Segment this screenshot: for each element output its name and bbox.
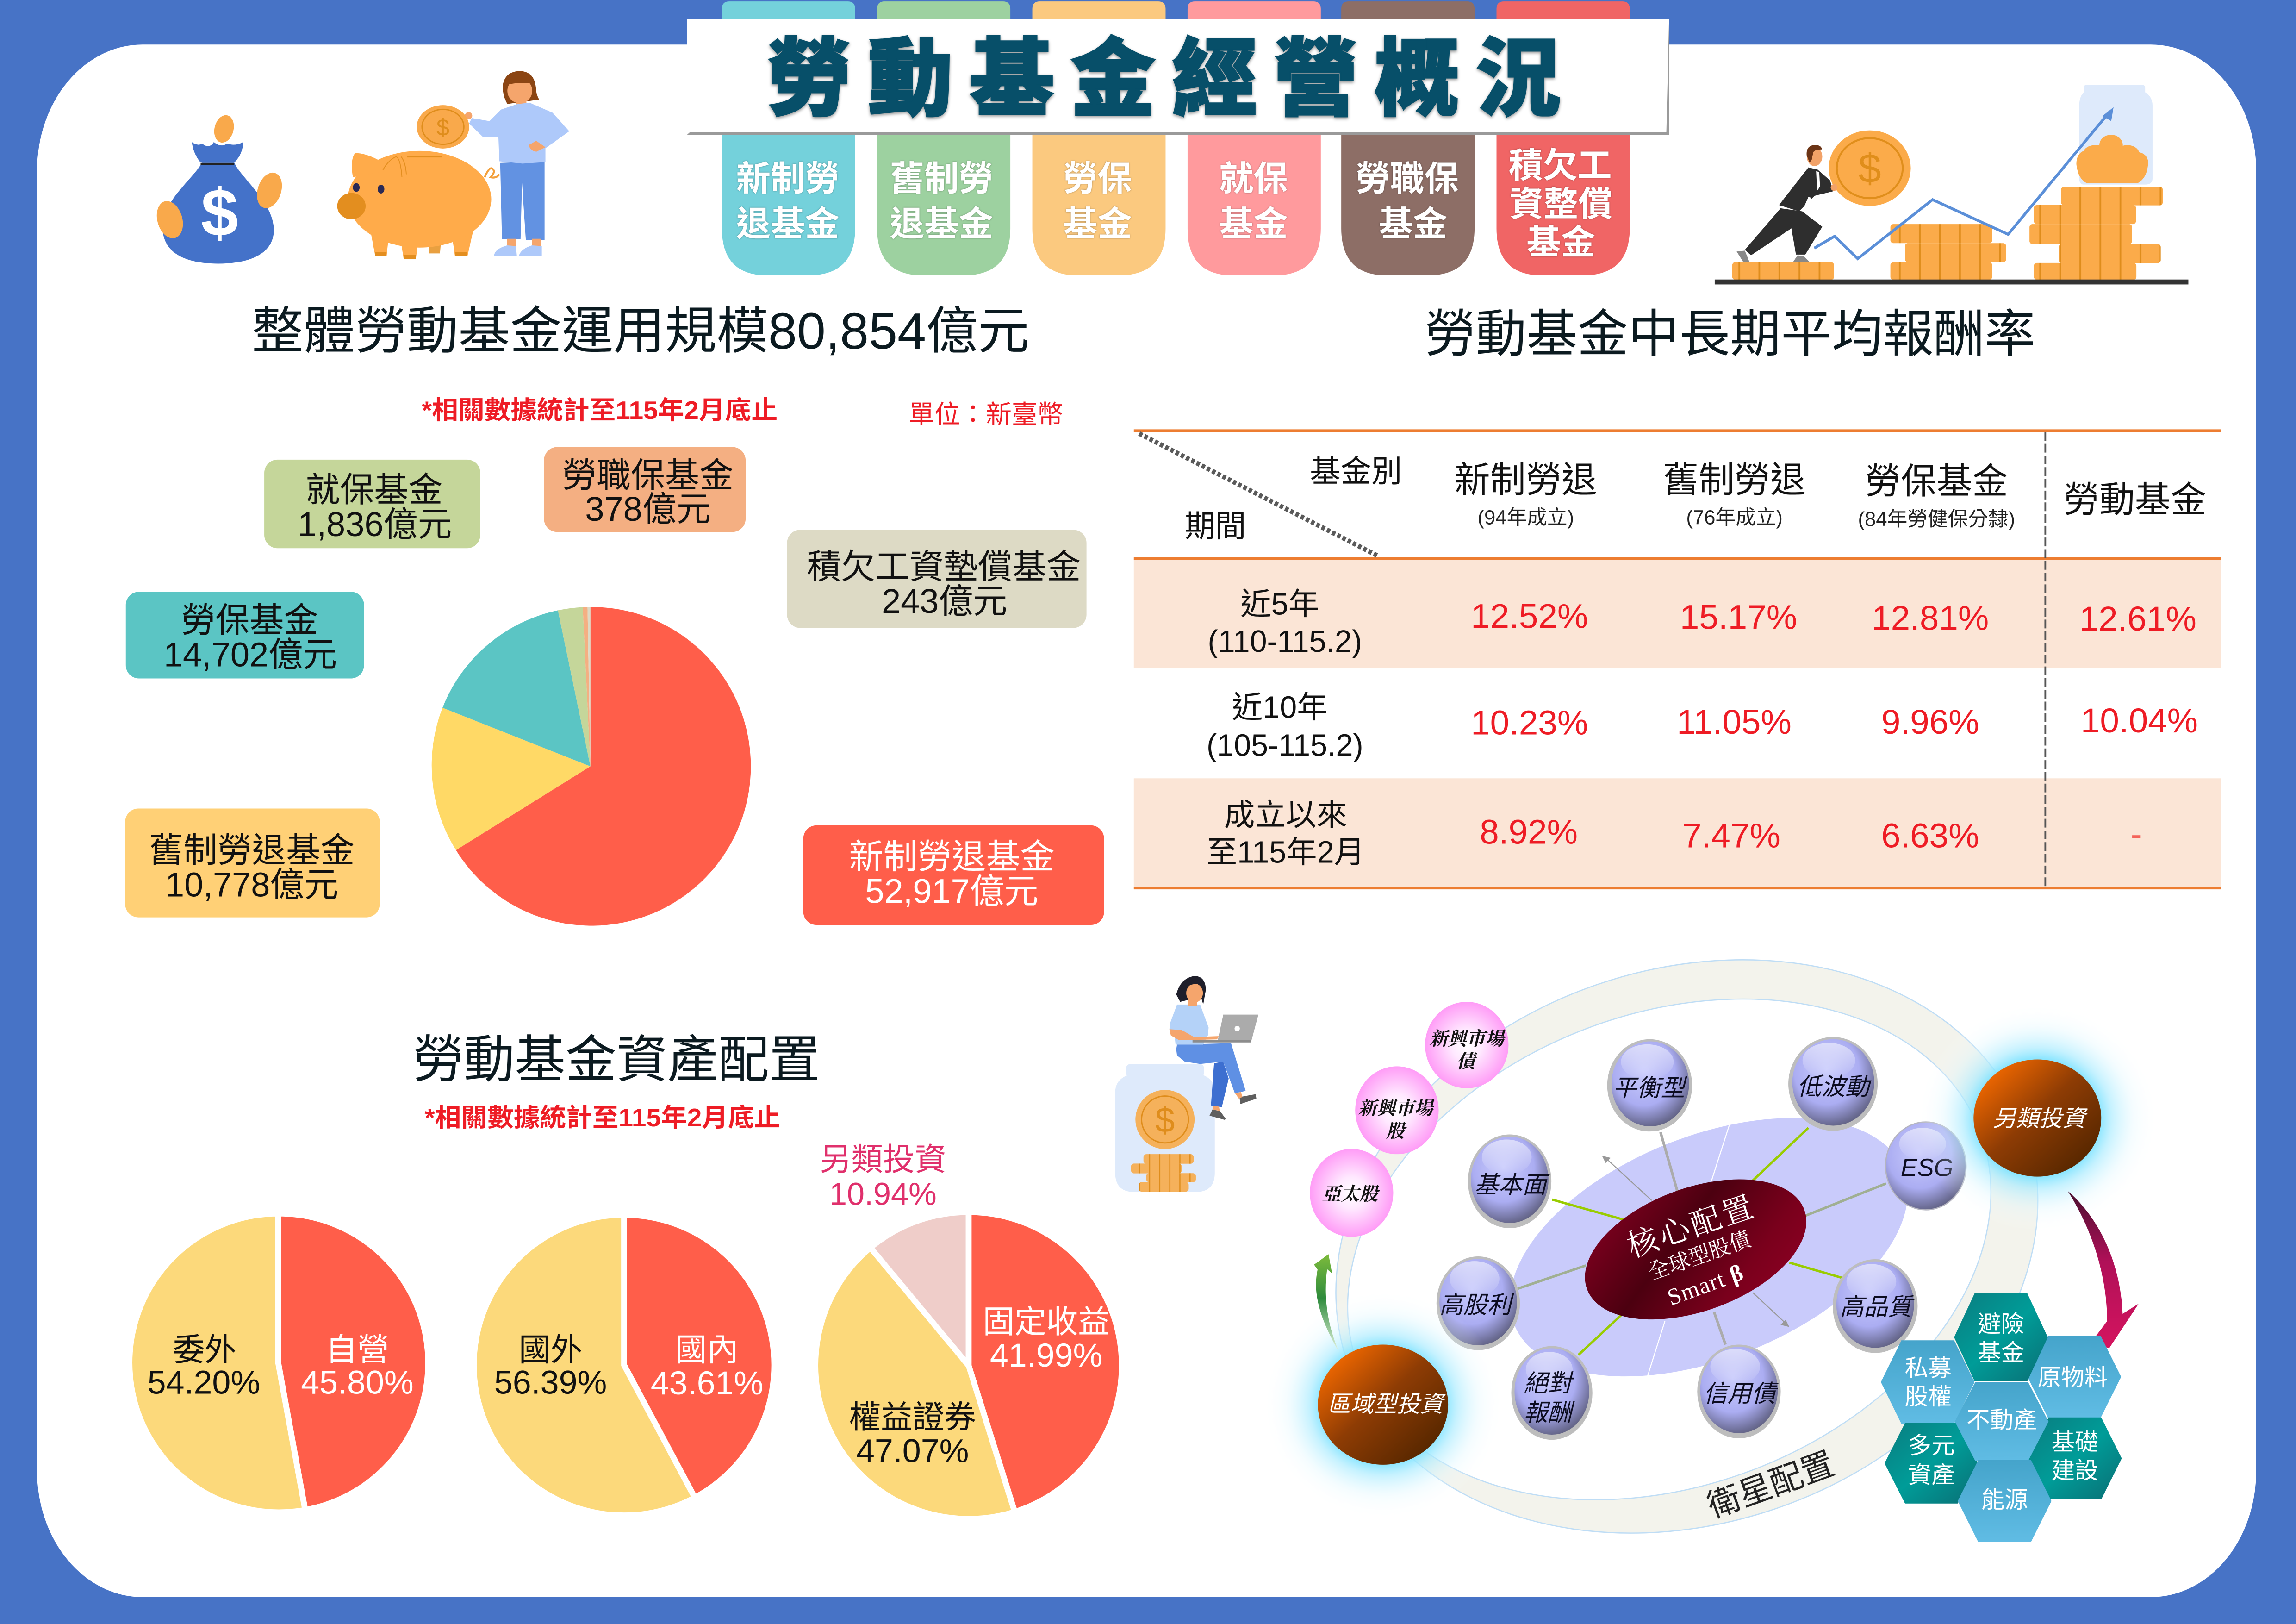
pie: asset classes: 固定收益 — [983, 1304, 1110, 1340]
orb: alternative investment: 另類投資 — [1993, 1106, 2088, 1131]
hexagon: private equity — [1881, 1340, 1975, 1424]
bubble: emerging market equities: 新興市場 — [1358, 1098, 1435, 1119]
label: arrear wage fund: 積欠工資墊償基金 — [807, 548, 1081, 586]
row: last 5 years — [1208, 587, 2196, 659]
sphere: high dividend: 高股利 — [1439, 1291, 1515, 1318]
hexagon cluster: alternative asset types — [1881, 1293, 2122, 1542]
label: old pension fund: 10,778億元 — [165, 865, 338, 904]
core allocation center: 核心配置 — [1623, 1190, 1760, 1264]
row: last 10 years — [1207, 690, 2198, 763]
bubble: emerging market equities — [1355, 1066, 1439, 1154]
label: arrear wage fund: 243億元 — [882, 582, 1007, 620]
row: last 5 years: 近5年 — [1240, 587, 1319, 621]
row: last 10 years: 11.05% — [1677, 702, 1792, 741]
table row backgrounds — [1134, 559, 2221, 888]
row: last 5 years: (110-115.2) — [1208, 625, 1362, 659]
hexagon: infrastructure: 基礎 — [2052, 1429, 2098, 1455]
label: satellite allocation: 衛星配置 — [1703, 1445, 1839, 1525]
sphere: ESG — [1885, 1122, 1966, 1210]
row: since inception: 至115年2月 — [1207, 836, 1365, 870]
tab: old labor pension fund — [877, 1, 1010, 275]
row: since inception: 6.63% — [1881, 816, 1979, 855]
bubble: emerging market equities: 股 — [1386, 1121, 1407, 1142]
title: 勞動基金經營概況 — [766, 31, 1577, 126]
woman with laptop — [1170, 976, 1258, 1120]
note: data date 2: *相關數據統計至115年2月底止 — [425, 1103, 780, 1132]
hexagon: hedge funds: 避險 — [1978, 1311, 2024, 1337]
row: since inception: 7.47% — [1682, 816, 1780, 855]
tab: new labor pension fund: 退基金 — [736, 205, 840, 243]
big coin — [1829, 131, 1911, 206]
bubble: asia pacific equities: 亞太股 — [1322, 1184, 1380, 1205]
table header: (94年成立) — [1477, 506, 1574, 529]
note: data date: *相關數據統計至115年2月底止 — [422, 396, 778, 425]
sphere: fundamental: 基本面 — [1475, 1171, 1550, 1198]
tab: new labor pension fund: 新制勞 — [736, 159, 840, 198]
hexagon: multi asset: 資產 — [1908, 1462, 1955, 1488]
table header: 基金別 — [1310, 455, 1402, 489]
fund tabs — [722, 1, 1630, 275]
icon: piggy bank with woman holding a coin: $ — [436, 114, 449, 141]
sphere: absolute return — [1511, 1346, 1593, 1440]
table header: 新制勞退 — [1454, 460, 1597, 500]
row: last 10 years: 10.04% — [2081, 701, 2198, 740]
row: since inception — [1207, 798, 2142, 870]
table header: 勞動基金 — [2064, 480, 2206, 520]
jar coins — [2076, 135, 2148, 183]
row: since inception: 8.92% — [1480, 812, 1578, 851]
label: new pension fund: 新制勞退基金 — [849, 837, 1055, 876]
pie: domestic vs foreign: 國外 — [519, 1332, 582, 1368]
row: last 5 years: 12.52% — [1471, 597, 1588, 636]
pie: domestic vs foreign: 43.61% — [651, 1365, 763, 1402]
table header: (84年勞健保分隸) — [1858, 508, 2015, 531]
row: last 10 years: 10.23% — [1471, 703, 1588, 742]
hexagon: infrastructure — [2028, 1418, 2122, 1499]
hexagon: private equity: 私募 — [1905, 1355, 1952, 1381]
pie: asset classes — [815, 1212, 1122, 1519]
orb: regional investment: 區域型投資 — [1327, 1391, 1446, 1417]
tab: labor insurance fund: 基金 — [1063, 205, 1132, 243]
pie: domestic vs foreign — [474, 1215, 774, 1515]
label: new pension fund: 52,917億元 — [865, 872, 1039, 911]
sphere: absolute return: 報酬 — [1524, 1399, 1575, 1426]
table header: (76年成立) — [1686, 506, 1783, 529]
table header: 期間 — [1185, 510, 1246, 544]
illustration: woman on jar: $ — [1155, 1101, 1175, 1140]
pie: self managed vs outsourced: 委外 — [173, 1332, 236, 1368]
hexagon: energy — [1958, 1460, 2052, 1542]
hexagon: real estate: 不動產 — [1966, 1407, 2037, 1433]
jar — [2079, 85, 2153, 185]
pie chart: fund scale — [432, 607, 751, 926]
sphere: credit bonds: 信用債 — [1704, 1380, 1779, 1407]
coin stacks — [1732, 187, 2163, 280]
tab: employment insurance fund: 基金 — [1219, 205, 1288, 243]
bubble: emerging market bonds: 新興市場 — [1429, 1028, 1506, 1049]
label: employment insurance fund — [264, 460, 480, 548]
hexagon: real estate — [1955, 1382, 2048, 1461]
label: old pension fund: 舊制勞退基金 — [149, 831, 355, 869]
pie: self managed vs outsourced: 45.80% — [301, 1364, 414, 1401]
tab: arrear wage payment fund — [1497, 1, 1630, 275]
satellite ring — [1257, 868, 2116, 1624]
row: last 5 years: 12.61% — [2079, 599, 2196, 638]
pie: asset classes: 權益證券 — [849, 1399, 976, 1435]
hexagon: raw materials: 原物料 — [2038, 1364, 2108, 1391]
label: alternative investments share: 10.94% — [829, 1176, 937, 1212]
diagram: core satellite allocation — [1257, 868, 2158, 1624]
pie: self managed vs outsourced: 54.20% — [148, 1364, 260, 1401]
row: last 5 years: 12.81% — [1872, 598, 1989, 637]
man — [1736, 145, 1837, 262]
sphere: high quality: 高品質 — [1840, 1293, 1915, 1320]
table header — [1185, 455, 2206, 544]
label: alternative investments share: 另類投資 — [820, 1142, 946, 1177]
hexagon: multi asset — [1885, 1423, 1978, 1504]
pie: domestic vs foreign: 國內 — [675, 1332, 739, 1368]
tab: arrear wage payment fund: 資整償 — [1509, 185, 1612, 224]
illustration: woman on jar — [1115, 976, 1258, 1192]
table header: 舊制勞退 — [1663, 460, 1806, 500]
row: last 10 years: 9.96% — [1881, 702, 1979, 741]
heading: mid long term returns: 勞動基金中長期平均報酬率 — [1425, 306, 2035, 362]
pie: asset classes: 41.99% — [990, 1337, 1102, 1374]
sphere: balanced: 平衡型 — [1613, 1074, 1687, 1101]
core allocation center: 全球型股債 — [1645, 1227, 1755, 1284]
note: unit: 單位：新臺幣 — [908, 400, 1063, 429]
orb: alternative investment — [1917, 1004, 2158, 1232]
sphere: credit bonds — [1697, 1344, 1781, 1438]
label: labor insurance fund — [126, 592, 364, 679]
tab: new labor pension fund — [722, 1, 855, 275]
table header: 勞保基金 — [1865, 462, 2008, 501]
label: occupational insurance fund: 勞職保基金 — [562, 456, 734, 494]
sphere: high dividend — [1437, 1256, 1520, 1350]
connector lines — [1517, 1120, 1886, 1377]
arrow: regional to bubbles — [1314, 1254, 1339, 1352]
ground — [1715, 280, 2188, 284]
woman — [465, 71, 569, 256]
row: since inception: 成立以來 — [1224, 798, 1347, 832]
hexagon: private equity: 股權 — [1905, 1383, 1952, 1410]
table: mid long term returns — [1134, 431, 2221, 888]
coin — [417, 105, 469, 149]
heading: asset allocation: 勞動基金資產配置 — [413, 1031, 820, 1088]
pig — [337, 151, 499, 259]
hexagon: hedge funds — [1954, 1293, 2048, 1381]
bubble: asia pacific equities — [1310, 1149, 1393, 1237]
tab: arrear wage payment fund: 基金 — [1526, 223, 1595, 262]
hexagon: energy: 能源 — [1981, 1487, 2028, 1513]
arrow: alternative to hexagons — [2067, 1191, 2139, 1348]
tab: employment insurance fund — [1188, 1, 1321, 275]
label: labor insurance fund: 勞保基金 — [181, 601, 318, 639]
tab: occupational accident insurance fund: 基金 — [1379, 205, 1448, 243]
tab: occupational accident insurance fund: 勞職保 — [1356, 159, 1459, 198]
pie: domestic vs foreign: 56.39% — [494, 1364, 607, 1401]
sphere: absolute return: 絕對 — [1524, 1370, 1574, 1397]
label: arrear wage fund — [787, 530, 1087, 628]
tab: arrear wage payment fund: 積欠工 — [1509, 146, 1612, 185]
sphere: fundamental — [1468, 1134, 1551, 1228]
core ellipse area — [1473, 1066, 1945, 1428]
sphere: balanced — [1607, 1039, 1692, 1131]
pie: self managed vs outsourced — [130, 1213, 428, 1512]
label: old pension fund — [125, 808, 380, 918]
pie: self managed vs outsourced: 自營 — [325, 1332, 389, 1368]
illustration: man pushing coin up rising stacks — [1715, 85, 2188, 284]
tab: old labor pension fund: 舊制勞 — [890, 159, 993, 198]
rising line arrow — [1814, 111, 2110, 259]
label: occupational insurance fund: 378億元 — [585, 490, 711, 528]
icon: money bag — [153, 113, 286, 264]
label: occupational insurance fund — [544, 447, 746, 532]
bubble: emerging market bonds: 債 — [1456, 1051, 1478, 1072]
orb: regional investment — [1263, 1290, 1503, 1519]
icon: money bag: $ — [201, 175, 238, 250]
tab: labor insurance fund: 勞保 — [1063, 159, 1132, 198]
tab: old labor pension fund: 退基金 — [890, 205, 993, 243]
row: last 10 years: (105-115.2) — [1207, 729, 1363, 763]
row: last 5 years: 15.17% — [1680, 598, 1797, 637]
label: employment insurance fund: 就保基金 — [305, 471, 442, 509]
hexagon: hedge funds: 基金 — [1978, 1339, 2024, 1366]
tab: employment insurance fund: 就保 — [1219, 159, 1288, 198]
tab: labor insurance fund — [1033, 1, 1165, 275]
pie: asset classes: 47.07% — [856, 1433, 969, 1470]
core allocation center: Smart β — [1664, 1259, 1747, 1311]
row: since inception: - — [2131, 814, 2142, 853]
heading: total fund size: 整體勞動基金運用規模80,854億元 — [252, 303, 1029, 360]
tab: occupational accident insurance fund — [1341, 1, 1475, 275]
label: labor insurance fund: 14,702億元 — [164, 636, 337, 674]
hexagon: infrastructure: 建設 — [2052, 1457, 2098, 1484]
illustration: man pushing coin up rising stacks: $ — [1858, 145, 1881, 191]
row: last 10 years: 近10年 — [1232, 690, 1328, 725]
label: new pension fund — [803, 825, 1104, 925]
icon: piggy bank with woman holding a coin — [337, 71, 569, 259]
sphere: high quality — [1833, 1259, 1917, 1353]
title banner — [687, 19, 1669, 135]
sphere: ESG: ESG — [1901, 1154, 1953, 1182]
sphere: low volatility: 低波動 — [1797, 1073, 1872, 1100]
sphere: low volatility — [1788, 1037, 1878, 1131]
bubble: emerging market bonds — [1425, 1002, 1508, 1088]
core allocation center — [1566, 1152, 1825, 1347]
hexagon: raw materials — [2028, 1336, 2121, 1418]
hexagon: multi asset: 多元 — [1908, 1432, 1955, 1459]
label: alternative investments share — [820, 1142, 946, 1212]
label: employment insurance fund: 1,836億元 — [298, 505, 452, 543]
